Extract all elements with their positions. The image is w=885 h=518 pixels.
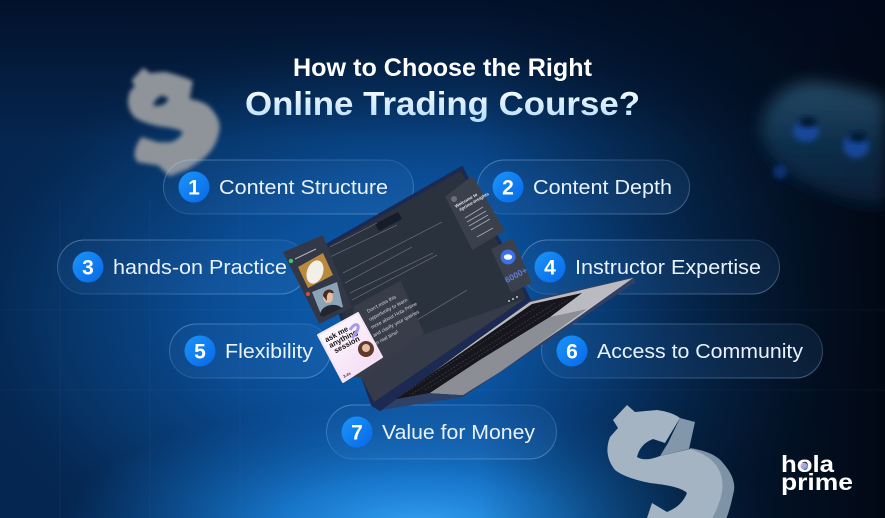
pill 6: Access to Community: Access to Community bbox=[597, 341, 803, 363]
welcome card: Welcome to bbox=[454, 192, 479, 209]
chat panel: and clarify your queries bbox=[372, 309, 421, 339]
welcome card bbox=[447, 178, 503, 248]
title: Online Trading Course? bbox=[245, 85, 640, 122]
ask me anything card: anything bbox=[327, 327, 359, 350]
welcome card: #prime-insights bbox=[458, 191, 490, 212]
chat panel: opportunity to learn bbox=[368, 297, 409, 323]
title bbox=[245, 54, 640, 122]
chat panel: in real time! bbox=[374, 329, 400, 347]
title: How to Choose the Right bbox=[293, 54, 593, 82]
icon: blurred dollar sign, upper left bbox=[130, 70, 218, 174]
pill 1: Content Structure: Content Structure bbox=[219, 177, 388, 199]
ask me anything card bbox=[318, 313, 382, 382]
logo: hola prime: hola bbox=[781, 451, 834, 477]
laptop illustration bbox=[285, 167, 636, 410]
discord card bbox=[493, 240, 530, 291]
pill 2: Content Depth: Content Depth bbox=[533, 177, 672, 199]
pill 1: Content Structure: 1 bbox=[188, 176, 200, 200]
icon: large silver dollar sign bbox=[607, 405, 734, 518]
pill 2: Content Depth bbox=[478, 160, 690, 214]
pill 4: Instructor Expertise: Instructor Expertise bbox=[575, 257, 761, 279]
logo: hola prime: prime bbox=[781, 469, 853, 495]
chat panel bbox=[350, 282, 426, 377]
pill 5: Flexibility bbox=[170, 324, 330, 378]
pill 2: Content Depth: 2 bbox=[502, 176, 514, 200]
pill 1: Content Structure bbox=[164, 160, 414, 214]
pill 6: Access to Community: 6 bbox=[566, 340, 578, 364]
pill 4: Instructor Expertise: 4 bbox=[544, 256, 556, 280]
chat panel: more about Hola Prime bbox=[370, 301, 419, 331]
ask me anything card: session bbox=[332, 334, 362, 355]
photo widget bbox=[285, 237, 350, 322]
pill 3: hands-on Practice bbox=[58, 240, 308, 294]
laptop base bbox=[380, 277, 636, 410]
pill 3: hands-on Practice: hands-on Practice bbox=[113, 257, 287, 279]
chat panel: Don't miss this bbox=[366, 294, 398, 315]
pill 5: Flexibility: 5 bbox=[194, 340, 206, 364]
ask me anything card: ask me bbox=[323, 324, 350, 344]
pill 3: hands-on Practice: 3 bbox=[82, 256, 94, 280]
logo: hola prime bbox=[781, 451, 853, 495]
ask me anything card: 3:4s bbox=[342, 370, 352, 379]
pill 6: Access to Community bbox=[542, 324, 822, 378]
laptop screen bbox=[317, 167, 530, 410]
pill 4: Instructor Expertise bbox=[520, 240, 780, 294]
pill 7: Value for Money: 7 bbox=[351, 422, 363, 444]
pill 7: Value for Money: Value for Money bbox=[382, 422, 535, 444]
icon: blurred discord logo, upper right bbox=[761, 82, 885, 205]
pill 7: Value for Money bbox=[326, 405, 556, 459]
pill 5: Flexibility: Flexibility bbox=[225, 341, 313, 363]
discord card: 6000+ bbox=[503, 265, 529, 285]
